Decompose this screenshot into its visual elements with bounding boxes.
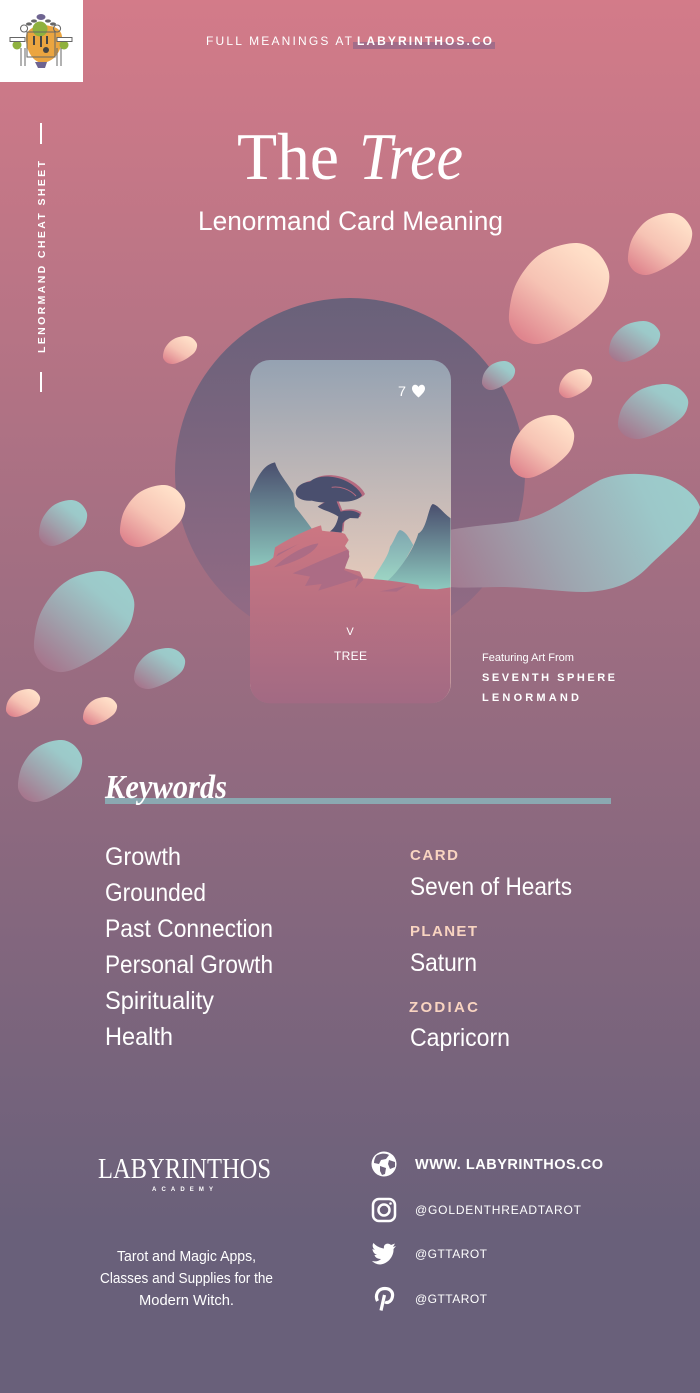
pinterest handle: @GTTAROT: [415, 1292, 488, 1306]
card correspondences: CARD: [410, 847, 458, 864]
middle mountain: [373, 530, 413, 583]
tarot card: The Tree: [250, 360, 451, 703]
rock and ground: [250, 525, 451, 703]
Labyrinthos Academy wordmark: [98, 1153, 271, 1193]
card roman numeral: V: [346, 626, 354, 638]
instagram handle: @GOLDENTHREADTAROT: [415, 1203, 582, 1217]
icon: instagram: [373, 1199, 395, 1221]
floating peach blobs: [6, 213, 692, 725]
card number and heart suit: 7: [398, 383, 406, 399]
left mountain: [250, 462, 312, 566]
subtitle: Lenormand Card Meaning: [198, 206, 503, 236]
large teal wave: [440, 474, 700, 592]
keywords list: Spirituality: [105, 987, 214, 1015]
icon: pinterest: [376, 1288, 393, 1310]
card correspondences: ZODIAC: [409, 999, 478, 1016]
keywords heading: [104, 769, 611, 806]
title: The: [237, 120, 339, 194]
header link: LABYRINTHOS.CO: [357, 34, 492, 48]
Labyrinthos Academy wordmark: LABYRINTHOS: [98, 1153, 271, 1185]
sidebar label: LENORMAND CHEAT SHEET: [36, 160, 48, 353]
art credit: LENORMAND: [482, 692, 579, 704]
header link: FULL MEANINGS AT: [206, 34, 353, 48]
header link: [206, 34, 495, 49]
keywords list: Past Connection: [105, 915, 273, 943]
tagline: [100, 1248, 273, 1309]
icon: Labyrinthos emblem logo: [0, 0, 83, 82]
card number and heart suit: [398, 383, 425, 399]
card correspondences: Capricorn: [410, 1024, 510, 1052]
title: Tree: [359, 120, 463, 194]
background circle: [175, 298, 525, 648]
keywords list: Health: [105, 1023, 173, 1051]
tagline: Tarot and Magic Apps,: [117, 1248, 256, 1265]
art credit: [482, 652, 615, 704]
keywords heading: Keywords: [104, 769, 227, 806]
art credit: Featuring Art From: [482, 652, 574, 664]
card sky: [250, 360, 451, 703]
card correspondences: PLANET: [410, 923, 477, 940]
card correspondences: [409, 847, 572, 1052]
art credit: SEVENTH SPHERE: [482, 672, 615, 684]
tree: [296, 475, 365, 533]
twitter handle: @GTTAROT: [415, 1247, 488, 1261]
keywords list: Growth: [105, 843, 181, 871]
floating teal blobs: [18, 321, 688, 802]
card correspondences: Saturn: [410, 949, 477, 977]
Labyrinthos Academy wordmark: ACADEMY: [152, 1187, 213, 1193]
tagline: Classes and Supplies for the: [100, 1270, 273, 1287]
keywords list: [105, 843, 273, 1051]
card correspondences: Seven of Hearts: [410, 873, 572, 901]
card name: TREE: [334, 649, 367, 663]
website link: WWW. LABYRINTHOS.CO: [415, 1157, 603, 1173]
keywords list: Grounded: [105, 879, 206, 907]
rock shadows: [274, 543, 407, 592]
rock, ground and tree: [250, 475, 451, 1301]
tagline: Modern Witch.: [139, 1292, 234, 1309]
title: [237, 120, 463, 194]
keywords list: Personal Growth: [105, 951, 273, 979]
right mountain: [387, 504, 451, 592]
icon: twitter: [372, 1243, 396, 1264]
icon: globe: [372, 1152, 396, 1176]
